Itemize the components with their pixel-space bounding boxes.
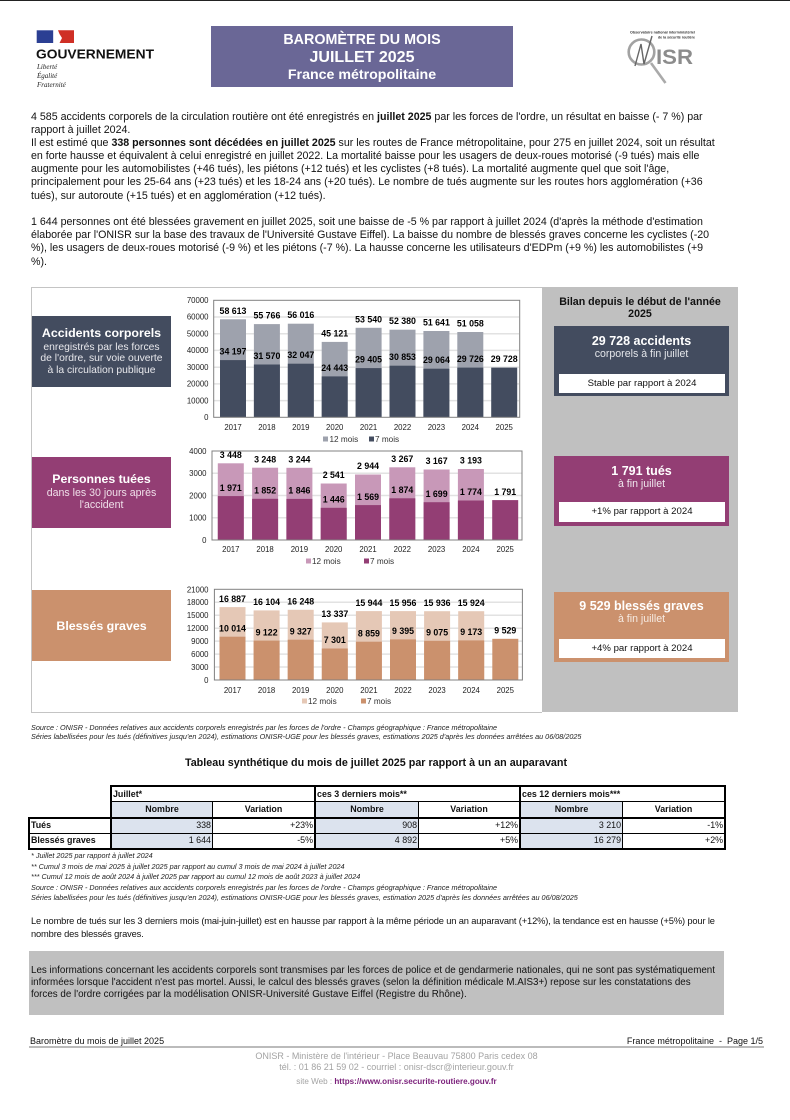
wordmark: GOUVERNEMENT (36, 46, 154, 61)
year labels: 2020 (326, 686, 344, 695)
year labels: 2019 (292, 423, 309, 432)
value labels: 16 248 (287, 596, 314, 606)
y axis labels (187, 585, 209, 685)
value labels: 1 774 (460, 487, 482, 497)
card: accidents (554, 326, 729, 396)
footer right: France métropolitaine - Page 1/5 (627, 1036, 763, 1046)
summary table: +5% (500, 835, 518, 845)
value labels: 1 569 (357, 492, 379, 502)
intro text: %). (31, 256, 47, 268)
value labels: 52 380 (389, 316, 416, 326)
year labels: 2018 (258, 423, 276, 432)
summary table: Juillet* (113, 788, 142, 798)
intro text: 1 644 personnes ont été blessées gravement en juillet 2025, soit une baisse de -5 % par rapport à juillet 2024 (d'après la méthode d'estimation (31, 216, 703, 228)
motto: Égalité (36, 72, 58, 80)
value labels: 3 244 (288, 454, 311, 464)
label: blessés graves (32, 590, 171, 661)
summary table: -5% (297, 835, 313, 845)
y axis labels: 18000 (187, 598, 209, 607)
label: personnes tuées (32, 457, 171, 528)
value labels: 9 075 (426, 628, 448, 638)
y axis labels: 50000 (187, 329, 209, 338)
motto: Liberté (36, 63, 58, 71)
table footnotes: Séries labellisées pour les tués (définitives jusqu'en 2024), estimations ONISR-UGE pour les blessés graves, estimation 2025 d'après les données arrêtées au 06/08/2025 (31, 893, 578, 902)
intro text: élaborée par l'ONISR sur la base des travaux de l'Université Gustave Eiffel). La baisse du nombre de blessés graves concerne les cyclistes (-20 (31, 229, 709, 241)
year labels: 2022 (394, 545, 411, 554)
year labels: 2022 (394, 686, 412, 695)
heading: bilan: 2025 (628, 308, 652, 320)
label: accidents corporels: enregistrés par les forces (43, 342, 160, 352)
y axis labels: 3000 (191, 663, 209, 672)
methodology note box: forces de l'ordre corrigées par la modélisation ONISR-Université Gustave Eiffel (Registre du Rhône). (31, 989, 467, 1000)
summary table: 908 (402, 820, 417, 830)
value labels (219, 594, 516, 645)
year labels: 2024 (463, 686, 481, 695)
value labels: 3 267 (391, 454, 413, 464)
value labels: 2 944 (357, 461, 379, 471)
trend paragraph: Le nombre de tués sur les 3 derniers mois (mai-juin-juillet) est en hausse par rapport à la même période un an auparavant (+12%), la tendance est en hausse (+5%) pour le (31, 916, 715, 926)
intro text (31, 110, 715, 268)
summary table: ces 12 derniers mois*** (522, 788, 620, 798)
y axis labels: 30000 (187, 363, 209, 372)
value labels: 29 064 (423, 355, 450, 365)
summary table: Variation (450, 804, 488, 814)
value labels: 9 327 (290, 626, 312, 636)
legend: 12 mois (312, 557, 341, 566)
value labels: 1 791 (494, 487, 516, 497)
value labels: 9 395 (392, 626, 414, 636)
value labels: 51 641 (423, 318, 450, 328)
card: accidents: corporels à fin juillet (595, 348, 688, 360)
year labels: 2022 (394, 423, 411, 432)
y axis labels: 60000 (187, 313, 209, 322)
y axis labels (189, 447, 207, 545)
card: accidents: 29 728 accidents (592, 334, 691, 348)
value labels: 1 874 (391, 485, 413, 495)
intro text: rapport à juillet 2024. (31, 124, 130, 136)
y axis labels: 70000 (187, 296, 209, 305)
methodology note box: Les informations concernant les accidents corporels sont transmises par les forces de police et de gendarmerie nationales, qui ne sont pas systématiquement (31, 964, 715, 976)
summary table: ces 3 derniers mois** (317, 788, 407, 798)
y axis labels: 2000 (189, 491, 207, 500)
bars: 7 mois (218, 496, 518, 540)
value labels: 15 944 (355, 598, 382, 608)
year labels: 2018 (258, 686, 275, 695)
summary table: Variation (655, 804, 692, 814)
label: personnes tuées: dans les 30 jours après (47, 486, 156, 498)
value labels: 10 014 (219, 623, 246, 633)
year labels: 2021 (360, 686, 378, 695)
value labels: 3 167 (426, 456, 448, 466)
value labels: 2 541 (323, 470, 345, 480)
legend: 12 mois (330, 435, 358, 444)
label: accidents corporels: de l'ordre, sur voie ouverte (40, 353, 163, 364)
card: tués (554, 456, 729, 526)
chart: blessés graves (187, 585, 523, 706)
y axis labels: 10000 (187, 396, 209, 405)
year labels: 2020 (326, 423, 344, 432)
value labels: 56 016 (287, 310, 314, 320)
legend (306, 557, 394, 566)
year labels: 2017 (222, 545, 239, 554)
value labels: 16 887 (219, 594, 246, 604)
year labels: 2023 (428, 423, 445, 432)
year labels: 2023 (428, 545, 445, 554)
summary table (28, 785, 726, 850)
y axis labels: 0 (204, 413, 209, 422)
value labels: 1 446 (323, 494, 345, 504)
summary table: +2% (705, 835, 723, 845)
value labels: 9 122 (256, 627, 278, 637)
value labels: 1 846 (288, 486, 311, 496)
top border line (0, 0, 790, 1)
label: personnes tuées: l'accident (80, 498, 123, 510)
year labels: 2017 (224, 686, 241, 695)
bars: 12 mois (220, 319, 483, 417)
card: tués: à fin juillet (618, 478, 665, 490)
value labels: 51 058 (457, 318, 484, 328)
logo: Gouvernement (36, 30, 154, 89)
table footnotes: Source : ONISR - Données relatives aux accidents corporels enregistrés par les forces de l'ordre - Champs géographique : France métropolitaine (31, 882, 497, 892)
value labels: 29 726 (457, 354, 484, 364)
icon: magnifier (629, 36, 666, 83)
value labels: 7 301 (324, 635, 346, 645)
methodology note box (29, 951, 724, 1015)
legend: 7 mois (367, 697, 391, 706)
trend paragraph: nombre des blessés graves. (31, 928, 144, 938)
value labels: 45 121 (321, 328, 348, 338)
intro text: 4 585 accidents corporels de la circulation routière ont été enregistrés en juillet 2025 par les forces de l'ordre, un résultat en baisse (- 7 %) par (31, 110, 703, 122)
label: accidents corporels: Accidents corporels (42, 326, 161, 340)
logo small caption: de la sécurité routière (658, 34, 696, 40)
legend (323, 435, 399, 444)
card: accidents: Stable par rapport à 2024 (588, 378, 696, 389)
title banner: JUILLET 2025 (310, 48, 414, 66)
intro text: augmente pour les automobilistes (+46 tués), les piétons (+12 tués) et les cyclistes (+8 tués). La mortalité augmente quel que soit l'âge, (31, 163, 669, 175)
logo small caption (630, 30, 696, 40)
value labels: 16 104 (253, 597, 280, 607)
y axis labels: 12000 (187, 624, 209, 633)
chart: accidents corporels (187, 296, 520, 444)
value labels: 3 193 (460, 456, 482, 466)
card: blessés graves: à fin juillet (618, 613, 665, 625)
y axis labels: 6000 (191, 650, 209, 659)
intro text: Il est estimé que 338 personnes sont décédées en juillet 2025 sur les routes de France métropolitaine, pour 275 en juillet 2024, soit un résultat (31, 137, 715, 149)
logo: ONISR (627, 30, 696, 84)
year labels: 2020 (325, 545, 343, 554)
card: blessés graves: 9 529 blessés graves (579, 599, 704, 613)
y axis labels: 40000 (187, 346, 209, 355)
summary table: 1 644 (189, 835, 211, 845)
year labels: 2019 (291, 545, 308, 554)
summary table: Tués (31, 820, 51, 830)
y axis labels: 9000 (191, 637, 209, 646)
value labels: 58 613 (220, 306, 247, 316)
summary table: Nombre (350, 804, 384, 814)
legend: 7 mois (375, 435, 399, 444)
contact block (255, 1051, 538, 1072)
bars: 12 mois (220, 607, 484, 680)
value labels: 1 699 (426, 489, 448, 499)
value labels: 3 448 (220, 450, 242, 460)
methodology note box: informées lorsque l'accident n'est pas mortel. Aussi, le calcul des blessés graves (selon la définition médicale M.AIS3+) repose sur les constatations des (31, 977, 691, 988)
logo small caption: Observatoire national interministériel (630, 30, 695, 34)
heading: bilan: Bilan depuis le début de l'année (559, 296, 721, 308)
summary table: -1% (707, 820, 723, 830)
chart: personnes tuées (189, 447, 522, 566)
value labels: 31 570 (253, 351, 280, 361)
source note: Séries labellisées pour les tués (définitives jusqu'en 2024), estimations ONISR-UGE pour les blessés graves, estimations 2025 d'après les données arrêtées au 06/08/2025 (31, 732, 581, 741)
motto: Fraternité (36, 81, 67, 89)
y axis labels: 21000 (187, 585, 209, 594)
value labels: 15 956 (390, 598, 417, 608)
heading: bilan (559, 296, 721, 320)
legend: 7 mois (370, 557, 394, 566)
value labels: 34 197 (220, 347, 247, 357)
contact block: tél. : 01 86 21 59 02 - courriel : onisr-dscr@interieur.gouv.fr (279, 1062, 514, 1072)
year labels: 2023 (428, 686, 446, 695)
y axis labels (187, 296, 209, 422)
year labels: 2017 (224, 423, 242, 432)
summary table: Nombre (555, 804, 588, 814)
legend: 12 mois (308, 697, 337, 706)
source note (31, 723, 582, 741)
year labels (222, 545, 515, 554)
source note: Source : ONISR - Données relatives aux accidents corporels enregistrés par les forces de l'ordre - Champs géographique : France métropolitaine (31, 723, 497, 732)
year labels: 2025 (497, 545, 515, 554)
value labels (220, 306, 518, 373)
summary table: Blessés graves (31, 835, 96, 845)
table footnotes (31, 851, 578, 902)
value labels: 13 337 (321, 609, 348, 619)
summary table: 16 279 (594, 835, 621, 845)
bars: 12 mois (218, 463, 484, 540)
year labels: 2024 (462, 423, 480, 432)
card: blessés graves: +4% par rapport à 2024 (591, 643, 693, 654)
summary table: 338 (196, 820, 211, 830)
year labels: 2021 (360, 423, 377, 432)
value labels: 3 248 (254, 454, 276, 464)
y axis labels: 20000 (187, 380, 209, 389)
year labels: 2025 (497, 686, 515, 695)
table heading: Tableau synthétique du mois de juillet 2025 par rapport à un an auparavant (185, 757, 567, 769)
summary table: Variation (245, 804, 282, 814)
value labels: 1 852 (254, 486, 276, 496)
y axis labels: 1000 (189, 514, 207, 522)
bars: 7 mois (220, 360, 517, 417)
title banner (211, 26, 513, 87)
card: tués: +1% par rapport à 2024 (591, 506, 693, 517)
summary table: 3 210 (599, 820, 621, 830)
bars: 7 mois (220, 637, 518, 680)
value labels: 9 529 (494, 626, 516, 636)
value labels: 24 443 (321, 363, 348, 373)
label: blessés graves: Blessés graves (56, 618, 147, 632)
y axis labels: 15000 (187, 611, 209, 620)
value labels: 9 173 (460, 627, 482, 637)
summary table: +23% (290, 820, 313, 830)
table footnotes: ** Cumul 3 mois de mai 2025 à juillet 2025 par rapport au cumul 3 mois de mai 2024 à juillet 2024 (31, 862, 345, 870)
title banner: France métropolitaine (288, 66, 436, 82)
y axis labels: 0 (204, 676, 209, 685)
website: site Web : https://www.onisr.securite-routiere.gouv.fr (296, 1077, 497, 1086)
table footnotes: * Juillet 2025 par rapport à juillet 2024 (31, 851, 153, 860)
y axis labels: 3000 (189, 469, 207, 478)
year labels (224, 423, 514, 432)
card: tués: 1 791 tués (611, 464, 672, 478)
contact block: ONISR - Ministère de l'intérieur - Place Beauvau 75800 Paris cedex 08 (255, 1051, 538, 1061)
year labels: 2025 (496, 423, 514, 432)
year labels: 2024 (462, 545, 480, 554)
label: personnes tuées: Personnes tuées (52, 472, 151, 486)
y axis labels: 0 (202, 536, 207, 545)
value labels: 1 971 (220, 483, 242, 493)
panel: white chart area (31, 287, 542, 713)
value labels: 32 047 (287, 350, 314, 360)
icon: French flag (37, 30, 74, 43)
card: blessés graves (554, 592, 729, 662)
title banner: BAROMÈTRE DU MOIS (283, 32, 441, 48)
value labels: 15 924 (458, 598, 485, 608)
footer rule (29, 1046, 764, 1048)
intro text: en forte hausse et équivalent à celui enregistré en juillet 2022. La mortalité baisse pour les usagers de deux-roues motorisé (-9 tués) mais elle (31, 150, 699, 162)
summary table: +12% (495, 820, 518, 830)
legend (302, 697, 391, 706)
y axis labels: 4000 (189, 447, 207, 456)
summary table: 4 892 (395, 835, 417, 845)
motto (36, 63, 67, 89)
value labels: 29 405 (355, 355, 382, 365)
logo letters: ISR (656, 46, 693, 69)
table footnotes: *** Cumul 12 mois de août 2024 à juillet 2025 par rapport au cumul 12 mois de août 2023 à juillet 2024 (31, 872, 360, 881)
summary table: Nombre (145, 804, 179, 814)
trend paragraph (31, 916, 715, 939)
year labels (224, 686, 515, 695)
value labels: 55 766 (253, 311, 280, 321)
value labels: 15 936 (424, 598, 451, 608)
value labels (220, 450, 516, 504)
value labels: 8 859 (358, 628, 380, 638)
label: accidents corporels: à la circulation publique (47, 365, 156, 376)
value labels: 29 728 (491, 354, 518, 364)
year labels: 2021 (359, 545, 377, 554)
label: accidents corporels (32, 316, 171, 387)
intro text: tués), sur autoroute (+15 tués) et en agglomération (+12 tués). (31, 190, 326, 202)
value labels: 53 540 (355, 314, 382, 324)
year labels: 2019 (292, 686, 309, 695)
footer left: Baromètre du mois de juillet 2025 (30, 1036, 164, 1046)
intro text: principalement pour les 25-64 ans (+23 tués) et les 18-24 ans (+20 tués). Le nombre de tués augmente sur les routes hors agglomération (+36 (31, 176, 703, 188)
panel: grey summary column (542, 287, 738, 712)
year labels: 2018 (256, 545, 274, 554)
value labels: 30 853 (389, 352, 416, 362)
intro text: %), les usagers de deux-roues motorisé (-9 %) et les piétons (-7 %). La hausse concerne les utilisateurs d'EDPm (+9 %) les automobilistes (+9 (31, 242, 703, 254)
